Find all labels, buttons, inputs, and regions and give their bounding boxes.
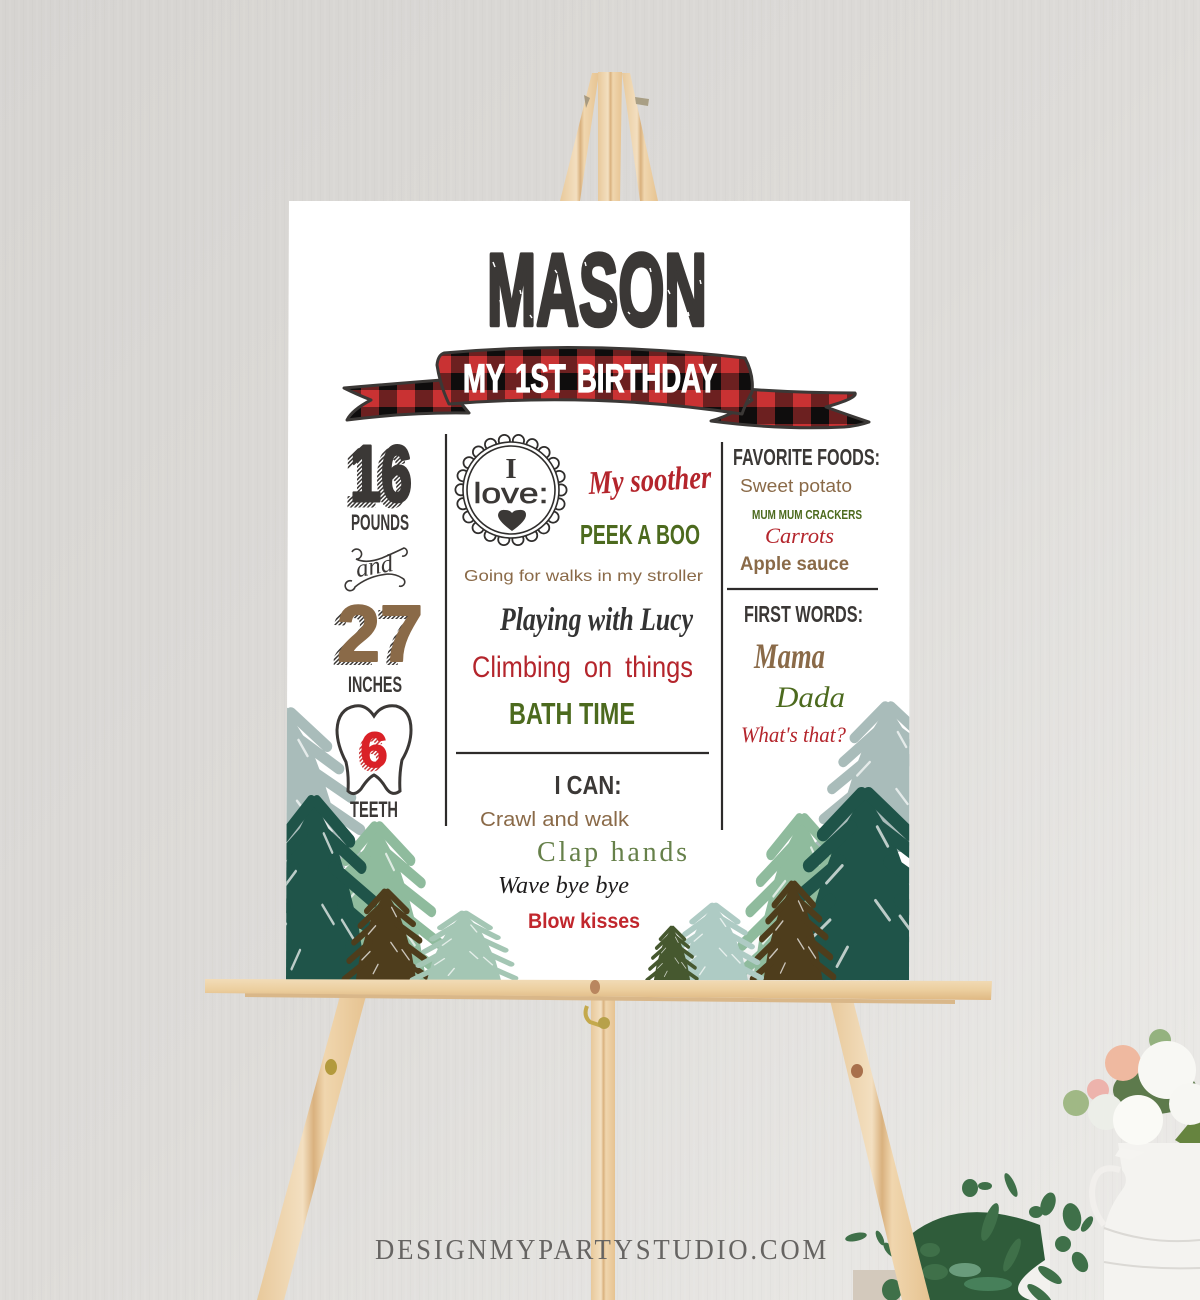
left grey pine — [286, 707, 366, 868]
flower greenery — [1113, 1066, 1197, 1114]
easel: front rail — [205, 979, 992, 1004]
and flourish: and — [354, 550, 396, 583]
milestone board — [286, 201, 910, 980]
list: things I love: Climbing on things — [472, 651, 693, 684]
banner text: MY 1ST BIRTHDAY — [463, 357, 717, 401]
stat: 16 pounds: POUNDS — [351, 510, 409, 535]
banner: plaid ribbon — [344, 348, 869, 428]
decor: beige box — [853, 1270, 900, 1300]
left dark pine — [286, 795, 378, 980]
right brown pine — [752, 883, 834, 981]
dividers — [446, 434, 878, 830]
list: things I love: BATH TIME — [509, 696, 635, 731]
list: favorite foods: MUM MUM CRACKERS — [752, 507, 862, 522]
list: things I love: Playing with Lucy — [499, 602, 693, 638]
stat: 16 pounds: 16 — [350, 429, 412, 518]
decor: white jug with flowers — [1063, 1029, 1200, 1300]
stat: 6 teeth: TEETH — [350, 797, 398, 822]
left mid green pine — [341, 821, 442, 980]
badge: I love — [461, 440, 561, 540]
stat: 6 teeth: 6 — [357, 726, 385, 782]
list: first words: What's that? — [741, 722, 846, 747]
badge: I love: love: — [474, 478, 548, 510]
right dark pine — [798, 787, 910, 980]
list: favorite foods: Sweet potato — [740, 476, 852, 496]
list: I can — [480, 770, 687, 933]
easel: lower legs and centre post — [257, 996, 930, 1300]
title: name — [487, 233, 707, 347]
and flourish — [345, 548, 407, 591]
list: favorite foods: Apple sauce — [740, 554, 849, 575]
list: I can: I CAN: — [554, 770, 622, 800]
easel: back top legs — [560, 72, 658, 201]
icon: tooth — [337, 706, 411, 794]
list: favorite foods: Carrots — [765, 523, 834, 548]
right grey pine — [815, 701, 910, 852]
list: first words: FIRST WORDS: — [744, 601, 863, 627]
list: first words: Mama — [753, 636, 825, 676]
watermark: DESIGNMYPARTYSTUDIO.COM — [375, 1234, 829, 1266]
list: things I love: My soother — [587, 460, 713, 502]
list: I can: Crawl and walk — [480, 809, 630, 831]
left brown pine — [344, 891, 428, 981]
banner left tail — [344, 380, 469, 420]
stat: 27 inches: INCHES — [348, 672, 402, 697]
pale pine right of centre — [667, 905, 761, 981]
stat: 6 teeth: 6 — [360, 722, 388, 778]
small pale pine — [413, 912, 515, 981]
stat: 16 pounds: 16 — [345, 433, 407, 524]
list: things I love — [464, 460, 713, 731]
banner right tail — [711, 389, 869, 428]
list: first words: Dada — [775, 681, 845, 714]
list: things I love: PEEK A BOO — [580, 519, 700, 550]
list: I can: Wave bye bye — [498, 873, 629, 899]
list: favorite foods — [733, 444, 880, 575]
right mid green pine — [738, 813, 832, 980]
stat: 6 teeth — [337, 706, 411, 822]
easel: brass hook — [586, 1006, 610, 1029]
stat: 27 inches: 27 — [331, 593, 419, 682]
stat: 16 pounds — [345, 429, 412, 535]
list: I can: Blow kisses — [528, 910, 640, 933]
list: things I love: Going for walks in my stroller — [464, 568, 704, 585]
forest illustration — [210, 705, 961, 984]
title: name: MASON — [487, 233, 707, 347]
stat: 27 inches: 27 — [337, 589, 423, 678]
banner centre — [437, 348, 752, 414]
small olive pine — [647, 927, 697, 981]
list: favorite foods: FAVORITE FOODS: — [733, 444, 880, 470]
decor: green potted plant — [844, 1172, 1095, 1300]
icon: heart — [498, 510, 526, 531]
list: I can: Clap hands — [537, 837, 687, 868]
badge: I love: I — [505, 453, 517, 485]
list: first words — [741, 601, 863, 747]
